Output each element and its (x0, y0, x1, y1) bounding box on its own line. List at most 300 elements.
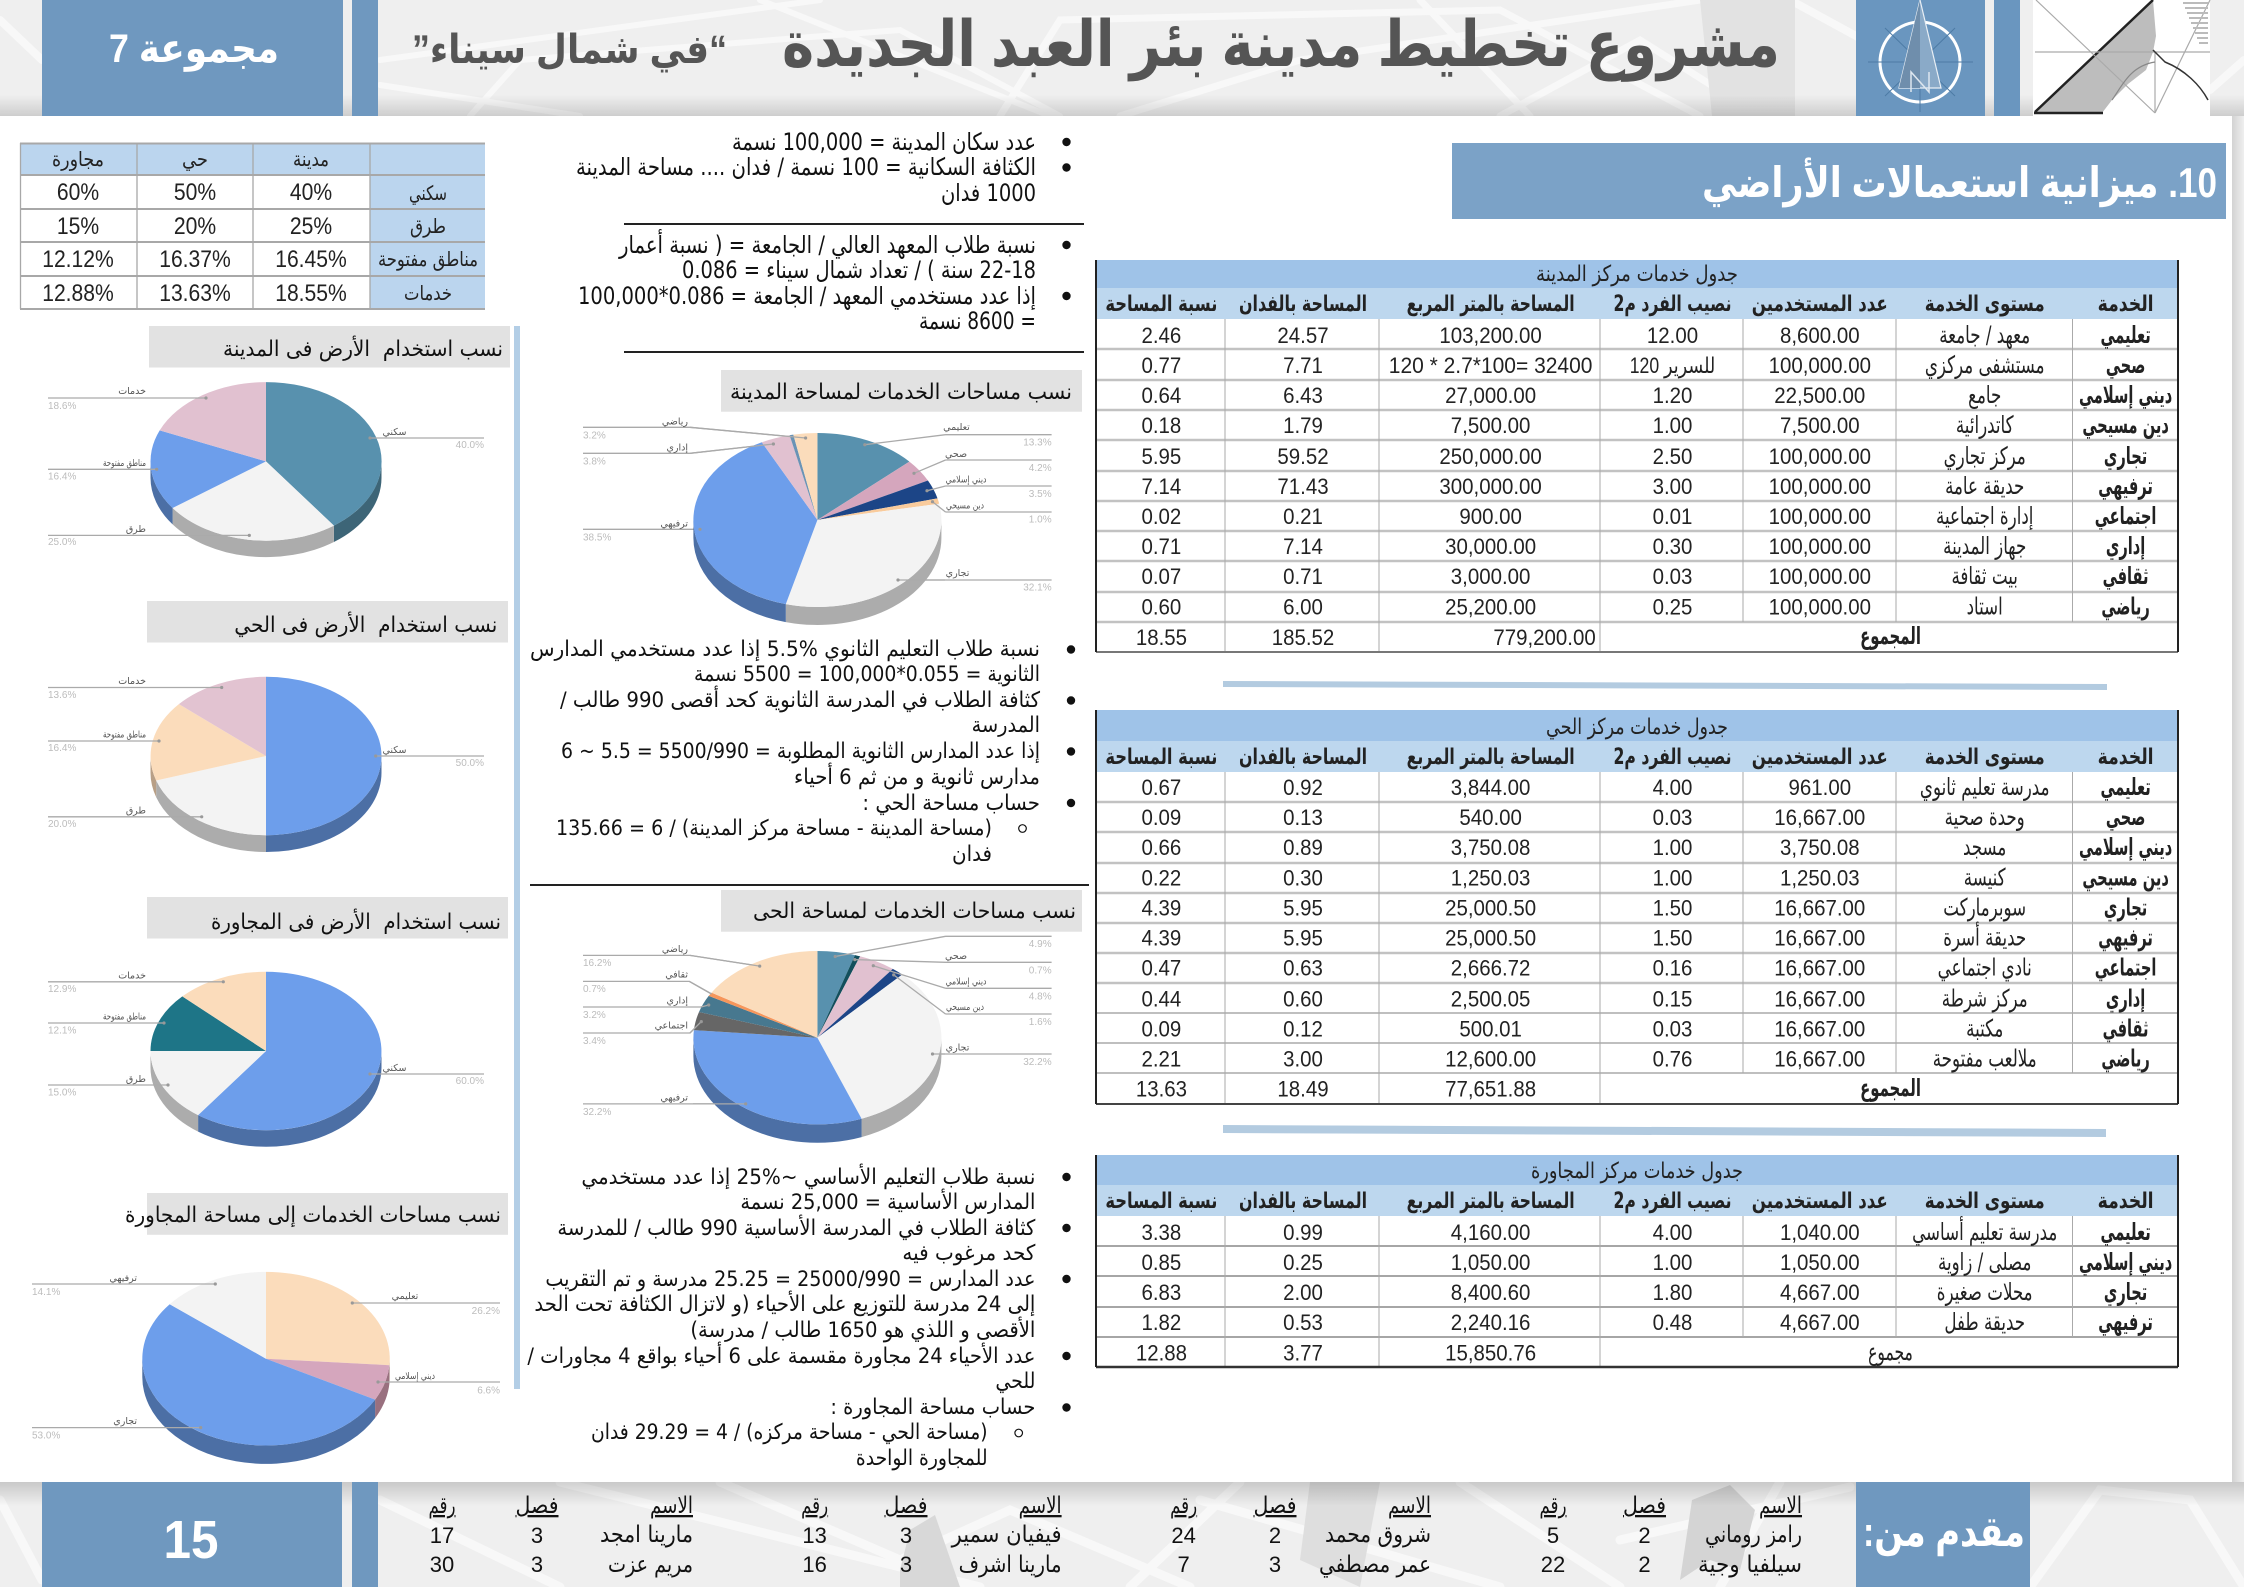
table: district center services: 13.63 (1136, 1077, 1187, 1102)
chart: land use in district: 13.6% (48, 690, 76, 701)
footer accent strip (352, 1482, 378, 1587)
table: district center services: 0.89 (1283, 835, 1323, 860)
table: city center services: 0.30 (1653, 534, 1692, 559)
table: land use summary: مناطق مفتوحة (378, 247, 478, 271)
text block: secondary school calculations: نسبة طلاب التعليم الثانوي %5.5 إذا عدد مستخدمي المدارس (530, 637, 1040, 662)
table: district center services: عدد المستخدمين (1752, 745, 1888, 770)
chart: services to neighbourhood area: ترفيهي (109, 1273, 137, 1284)
table: city center services: 2.50 (1653, 444, 1692, 469)
chart heading (721, 370, 1082, 412)
chart heading (149, 326, 510, 368)
table: city center services: 100,000.00 (1769, 534, 1871, 559)
chart: services to district area: صحي (945, 951, 967, 962)
text block: secondary school calculations: كثافة الطلاب في المدرسة الثانوية كحد أقصى 990 طالب / (560, 685, 1041, 713)
text block: basic school and neighbourhood calculations: نسبة طلاب التعليم الأساسي ~%25 إذا عدد مستخدمي (581, 1163, 1035, 1190)
table: district center services: المساحة بالفدان (1239, 745, 1367, 770)
table: city center services: 0.01 (1653, 504, 1692, 529)
chart: services to neighbourhood area: 53.0% (32, 1430, 60, 1442)
table: neighbourhood center services: المساحة بالمتر المربع (1407, 1189, 1575, 1214)
footer: team column 4 (1540, 1493, 1802, 1578)
table: district center services: نادي اجتماعي (1938, 953, 2032, 981)
table: district center services: 0.15 (1653, 987, 1692, 1012)
footer: team column 4: 22 (1541, 1552, 1565, 1577)
table: district center services (1096, 710, 2178, 1104)
footer: team column 2: الاسم (1019, 1493, 1062, 1519)
table: district center services: 1.00 (1653, 866, 1692, 891)
header subtitle: “في شمال سيناء” (412, 28, 727, 73)
table: city center services: 100,000.00 (1769, 444, 1871, 469)
table: neighbourhood center services: 0.99 (1283, 1220, 1323, 1245)
table: neighbourhood center services: 6.83 (1141, 1280, 1181, 1305)
text block: basic school and neighbourhood calculations: للمجاورة الواحدة (856, 1446, 988, 1471)
chart heading: نسب مساحات الخدمات إلى مساحة المجاورة (125, 1203, 501, 1228)
table: district center services: 4.00 (1653, 775, 1692, 800)
table: city center services: مستوى الخدمة (1925, 292, 2045, 317)
chart: land use in district: طرق (126, 806, 146, 816)
footer: team column 4: 2 (1638, 1523, 1651, 1548)
chart: services to city area: 32.1% (1023, 582, 1052, 594)
text block: secondary school calculations: مدارس ثانوية و من ثم 6 أحياء (794, 762, 1040, 790)
table: city center services: 0.25 (1653, 595, 1692, 620)
chart: land use in city: طرق (126, 524, 146, 535)
table: city center services: 71.43 (1277, 474, 1329, 499)
table: district center services: 0.16 (1653, 956, 1692, 981)
footer: team column 1 (428, 1493, 693, 1578)
chart: services to city area: 3.2% (583, 430, 606, 442)
chart: services to district area: رياضي (662, 944, 688, 955)
table: district center services: 5.95 (1283, 896, 1323, 921)
table: district center services: 0.22 (1141, 866, 1181, 891)
table: land use summary: مجاورة (52, 147, 104, 171)
table: neighbourhood center services: مستوى الخدمة (1925, 1189, 2045, 1214)
table: neighbourhood center services: 0.85 (1141, 1250, 1181, 1275)
chart heading: نسب استخدام الأرض فى الحي (234, 611, 497, 638)
footer: team column 1: رقم (428, 1493, 456, 1519)
chart: services to district area: 0.7% (1029, 966, 1052, 976)
table: city center services: 2.46 (1141, 323, 1181, 348)
chart heading (125, 1193, 508, 1235)
table: district center services: مسجد (1963, 833, 2006, 861)
footer: team column 1: 17 (430, 1523, 454, 1548)
chart: land use in neighbourhood: خدمات (118, 970, 146, 982)
table: district center services: 0.09 (1141, 805, 1181, 830)
table: city center services: مستشفى مركزي (1925, 351, 2045, 379)
chart: services to city area: ديني إسلامي (946, 474, 986, 486)
table: city center services: 900.00 (1459, 504, 1522, 529)
table: district center services: 961.00 (1789, 775, 1851, 800)
table: district center services: سوبرماركت (1943, 893, 2026, 921)
table: city center services: 7.14 (1141, 474, 1181, 499)
table: district center services: المجموع (1860, 1073, 1921, 1102)
table: city center services: 120 * 2.7*100= 32400 (1389, 353, 1592, 378)
table: city center services: 0.02 (1141, 504, 1181, 529)
table: city center services: مركز تجاري (1944, 442, 2026, 470)
table: district center services: 500.01 (1459, 1017, 1522, 1042)
chart: services to district area: ترفيهي (660, 1092, 688, 1104)
table: city center services: 100,000.00 (1769, 595, 1871, 620)
chart: land use in neighbourhood: مناطق مفتوحة (103, 1012, 146, 1022)
table: neighbourhood center services: عدد المستخدمين (1752, 1189, 1888, 1214)
table: district center services: تعليمي (2100, 773, 2151, 801)
chart: land use in neighbourhood: سكني (382, 1063, 407, 1074)
table: city center services (1096, 260, 2178, 652)
section heading (1452, 143, 2226, 219)
table: district center services: 0.03 (1653, 1017, 1692, 1042)
chart: services to district area: 4.9% (1029, 939, 1052, 950)
table: neighbourhood center services: 4,667.00 (1780, 1280, 1860, 1305)
table: district center services: 3.00 (1283, 1047, 1323, 1072)
table: city center services: 1.79 (1283, 413, 1323, 438)
header accent strip right (1994, 0, 2020, 116)
table: neighbourhood center services: محلات صغيرة (1937, 1278, 2033, 1306)
table: land use summary: 60% (57, 179, 99, 205)
chart: services to neighbourhood area: ديني إسلامي (395, 1371, 435, 1382)
table: neighbourhood center services: 4,667.00 (1780, 1310, 1860, 1335)
footer: team column 2: مارينا اشرف (959, 1552, 1062, 1578)
chart: services to district area: تجاري (946, 1042, 970, 1054)
table: city center services: 3,000.00 (1451, 564, 1530, 589)
main title: مشروع تخطيط مدينة بئر العبد الجديدة (782, 8, 1780, 82)
table: neighbourhood center services: 1.82 (1141, 1310, 1181, 1335)
table: neighbourhood center services: نسبة المساحة (1105, 1189, 1217, 1214)
rule (624, 351, 1084, 353)
text block: secondary school calculations: الثانوية = 0.055*100,000 = 5500 نسمة (694, 662, 1040, 687)
table: neighbourhood center services: 2,240.16 (1451, 1310, 1530, 1335)
table: neighbourhood center services: 0.53 (1283, 1310, 1323, 1335)
footer: team column 1: 3 (531, 1523, 543, 1548)
table: city center services: نصيب الفرد م2 (1614, 292, 1732, 317)
table: district center services: 4.39 (1141, 926, 1181, 951)
table: city center services: 3.00 (1653, 474, 1692, 499)
chart: services to district area: 32.2% (1023, 1057, 1052, 1068)
chart: services to district area: 3.4% (583, 1036, 606, 1047)
table: city center services: استاد (1967, 592, 2003, 620)
footer: team column 4: رامز روماني (1705, 1522, 1802, 1548)
table: city center services: 100,000.00 (1769, 474, 1871, 499)
table: district center services: 4.39 (1141, 896, 1181, 921)
table: district center services: تجاري (2104, 894, 2147, 923)
chart: land use in neighbourhood: 12.1% (48, 1026, 76, 1036)
table: city center services: 59.52 (1277, 444, 1329, 469)
chart: land use in neighbourhood: 15.0% (48, 1088, 76, 1098)
table: neighbourhood center services: ترفيهي (2098, 1308, 2153, 1336)
text block: secondary school calculations (530, 637, 1075, 867)
chart: services to neighbourhood area (32, 1193, 508, 1464)
table: city center services: إداري (2106, 532, 2145, 561)
table: district center services: 5.95 (1283, 926, 1323, 951)
footer: team column 3: 2 (1269, 1523, 1281, 1548)
table: land use summary: 40% (290, 179, 332, 205)
divider (1223, 681, 2107, 690)
table: neighbourhood center services: نصيب الفرد م2 (1614, 1189, 1732, 1214)
chart: services to city area: صحي (945, 449, 967, 460)
chart heading (147, 897, 508, 938)
table: district center services: 18.49 (1277, 1077, 1329, 1102)
chart: land use in city: 18.6% (48, 401, 76, 412)
chart: services to district area: 1.6% (1029, 1017, 1052, 1028)
table: district center services: دين مسيحي (2082, 864, 2169, 892)
text block: city population calculations (576, 128, 1071, 335)
table: neighbourhood center services: 2.00 (1283, 1280, 1323, 1305)
text block: basic school and neighbourhood calculations: عدد المدارس = 25000/990 = 25.25 مدرسة و تم التقريب (545, 1267, 1035, 1292)
table: city center services: جامع (1968, 381, 2001, 409)
table: district center services: 1,250.03 (1780, 866, 1860, 891)
chart: services to city area: دين مسيحي (946, 500, 984, 512)
footer: team column 3 (1170, 1493, 1431, 1578)
table: district center services: 16,667.00 (1774, 896, 1865, 921)
chart: land use in district: 20.0% (48, 819, 76, 830)
table: land use summary: 12.12% (42, 246, 114, 272)
table: district center services: كنيسة (1964, 863, 2006, 891)
table: neighbourhood center services: ديني إسلامي (2079, 1248, 2172, 1276)
chart: land use in neighbourhood: 12.9% (48, 984, 76, 995)
footer: team column 2: 3 (900, 1552, 912, 1577)
table: district center services: 1,250.03 (1451, 866, 1530, 891)
table: neighbourhood center services: 3.77 (1283, 1341, 1323, 1366)
table: land use summary: مدينة (293, 147, 329, 171)
table: district center services: 0.30 (1283, 866, 1323, 891)
table: district center services: 3,750.08 (1780, 835, 1860, 860)
table: district center services: 0.92 (1283, 775, 1323, 800)
vertical blue divider (514, 326, 520, 1389)
footer: page number badge (42, 1482, 342, 1587)
table: district center services: 0.09 (1141, 1017, 1181, 1042)
table: city center services: 0.18 (1141, 413, 1181, 438)
chart: services to neighbourhood area: تعليمي (392, 1291, 419, 1302)
table: city center services: كاتدرائية (1956, 411, 2014, 439)
table: neighbourhood center services: المساحة بالفدان (1239, 1189, 1367, 1214)
table: city center services: 6.00 (1283, 595, 1323, 620)
footer: page number badge: 15 (164, 1510, 218, 1570)
chart: services to city area: 1.0% (1029, 514, 1052, 526)
chart: land use in district: 50.0% (456, 758, 484, 769)
table: land use summary: 12.88% (42, 280, 114, 306)
table: district center services: مدرسة تعليم ثانوي (1920, 773, 2049, 801)
table: city center services: للسرير 120 (1630, 353, 1715, 378)
table: city center services: 6.43 (1283, 383, 1323, 408)
table: city center services: 27,000.00 (1445, 383, 1536, 408)
table: city center services: 0.21 (1283, 504, 1323, 529)
table: city center services: إدارة اجتماعية (1936, 502, 2033, 531)
table: city center services: 7,500.00 (1451, 413, 1530, 438)
chart: land use in district (48, 601, 508, 852)
table: city center services: جدول خدمات مركز المدينة (1536, 262, 1738, 287)
table: land use summary: 25% (290, 213, 332, 239)
table: city center services: رياضي (2101, 593, 2150, 621)
table: land use summary: 16.45% (275, 246, 347, 272)
table: land use summary: حي (182, 147, 208, 172)
table: city center services: ترفيهي (2098, 472, 2153, 500)
table: city center services: 0.71 (1283, 564, 1323, 589)
table: city center services: 5.95 (1141, 444, 1181, 469)
table: land use summary: 20% (174, 213, 216, 239)
table: city center services: المساحة بالفدان (1239, 292, 1367, 317)
table: city center services: دين مسيحي (2082, 411, 2169, 439)
table: city center services: تجاري (2104, 442, 2147, 471)
table: district center services: 0.76 (1653, 1047, 1692, 1072)
text block: basic school and neighbourhood calculations (527, 1163, 1071, 1471)
chart: land use in city: 40.0% (456, 440, 484, 451)
text block: basic school and neighbourhood calculations: الأقصى و اللذي هو 1650 طالب / مدرسة) (690, 1316, 1035, 1343)
chart heading: نسب مساحات الخدمات لمساحة المدينة (730, 380, 1072, 405)
table: district center services: ترفيهي (2098, 924, 2153, 952)
chart: land use in district: مناطق مفتوحة (103, 730, 146, 740)
table: land use summary: 16.37% (159, 246, 231, 272)
table: city center services: 0.77 (1141, 353, 1181, 378)
table: district center services: 16,667.00 (1774, 805, 1865, 830)
table: city center services: 0.71 (1141, 534, 1181, 559)
table: city center services: 7.14 (1283, 534, 1323, 559)
text block: city population calculations: عدد سكان المدينة = 100,000 نسمة (732, 128, 1036, 156)
table: city center services: بيت ثقافة (1951, 562, 2018, 590)
chart: services to city area (583, 370, 1082, 625)
footer: team column 1: 30 (430, 1552, 454, 1577)
table: district center services: ديني إسلامي (2079, 833, 2172, 861)
table: district center services: صحي (2106, 803, 2145, 831)
table: district center services: 25,000.50 (1445, 896, 1536, 921)
footer: presented by badge (1856, 1482, 2030, 1587)
chart: services to city area: تعليمي (943, 422, 970, 433)
table: district center services: وحدة صحية (1945, 803, 2025, 831)
table: neighbourhood center services: 8,400.60 (1451, 1280, 1530, 1305)
table: neighbourhood center services: 3.38 (1141, 1220, 1181, 1245)
table: city center services: 8,600.00 (1780, 323, 1860, 348)
table: district center services: 540.00 (1459, 805, 1522, 830)
table: district center services: 0.60 (1283, 987, 1323, 1012)
chart: land use in city: 25.0% (48, 537, 76, 548)
footer: team column 2: فيفيان سمير (951, 1522, 1062, 1548)
text block: basic school and neighbourhood calculations: للحي (995, 1369, 1035, 1394)
table: district center services: 0.67 (1141, 775, 1181, 800)
table: city center services: المساحة بالمتر المربع (1407, 292, 1575, 317)
chart: services to district area: 3.2% (583, 1010, 606, 1021)
chart: services to neighbourhood area: 14.1% (32, 1287, 60, 1298)
text block: basic school and neighbourhood calculations: كثافة الطلاب في المدرسة الأساسية 990 طالب / للمدرسة (557, 1214, 1036, 1241)
table: district center services: مركز شرطة (1942, 984, 2028, 1012)
table: city center services: الخدمة (2098, 292, 2154, 317)
chart: land use in district: خدمات (118, 676, 146, 687)
table: district center services: جدول خدمات مركز الحي (1546, 715, 1728, 740)
table: neighbourhood center services: 15,850.76 (1445, 1341, 1536, 1366)
table: district center services: 2,666.72 (1451, 956, 1530, 981)
table: city center services: 7,500.00 (1780, 413, 1860, 438)
footer: team column 2: 16 (802, 1552, 827, 1577)
text block: city population calculations: نسبة طلاب المعهد العالي / الجامعة = ( نسبة أعمار (618, 229, 1036, 259)
table: land use summary (20, 143, 485, 309)
table: city center services: اجتماعي (2095, 502, 2156, 530)
chart: services to district area: 16.2% (583, 958, 611, 969)
footer: presented by badge: مقدم من: (1863, 1508, 2025, 1557)
table: neighbourhood center services: الخدمة (2098, 1189, 2154, 1214)
table: city center services: 30,000.00 (1445, 534, 1536, 559)
text block: city population calculations: = 8600 نسمة (919, 307, 1036, 335)
footer: team column 4: 5 (1547, 1523, 1559, 1548)
table: neighbourhood center services: جدول خدمات مركز المجاورة (1531, 1159, 1743, 1184)
chart heading: نسب استخدام الأرض فى المجاورة (211, 908, 501, 935)
table: neighbourhood center services: 1.00 (1653, 1250, 1692, 1275)
chart: land use in neighbourhood (48, 897, 508, 1147)
table: district center services: الخدمة (2098, 745, 2154, 770)
text block: secondary school calculations: إذا عدد المدارس الثانوية المطلوبة = 5500/990 = 5.5 ~ 6 (561, 739, 1040, 764)
text block: secondary school calculations: المدرسة (972, 713, 1040, 738)
table: neighbourhood center services: 12.88 (1136, 1341, 1187, 1366)
footer: team column 3: شروق محمد (1325, 1522, 1431, 1548)
table: city center services: معهد / جامعة (1939, 321, 2030, 349)
table: district center services: 0.03 (1653, 805, 1692, 830)
chart: land use in city: مناطق مفتوحة (103, 458, 146, 469)
icon: compass (1856, 0, 1985, 116)
footer: team column 3: رقم (1170, 1493, 1197, 1519)
table: city center services: 1.20 (1653, 383, 1692, 408)
table: city center services: تعليمي (2100, 321, 2151, 349)
header: group badge (42, 0, 343, 116)
text block: basic school and neighbourhood calculations: كحد مرغوب فيه (902, 1241, 1036, 1266)
table: neighbourhood center services: تعليمي (2100, 1218, 2151, 1246)
divider (1223, 1125, 2106, 1137)
text block: secondary school calculations: (مساحة المدينة - مساحة مركز المدينة) / 6 = 135.66 (556, 816, 992, 841)
chart: services to district area: 0.7% (583, 984, 606, 995)
table: district center services: 25,000.50 (1445, 926, 1536, 951)
table: city center services: 103,200.00 (1439, 323, 1542, 348)
table: district center services: 2,500.05 (1451, 987, 1530, 1012)
chart: land use in city: 16.4% (48, 472, 76, 482)
table: city center services: 100,000.00 (1769, 353, 1871, 378)
chart: services to neighbourhood area: 26.2% (472, 1306, 500, 1317)
footer: team column 3: الاسم (1388, 1493, 1431, 1519)
table: city center services: 300,000.00 (1439, 474, 1542, 499)
chart: services to city area: 38.5% (583, 532, 611, 544)
text block: basic school and neighbourhood calculations: (مساحة الحي - مساحة مركزه) / 4 = 29.29 فدان (591, 1420, 988, 1445)
table: neighbourhood center services: 1,050.00 (1780, 1250, 1860, 1275)
table: district center services: ثقافي (2103, 1015, 2149, 1043)
table: neighbourhood center services: مدرسة تعليم أساسي (1912, 1216, 2057, 1246)
footer: team column 2: 3 (900, 1523, 912, 1548)
table: district center services: حديقة أسرة (1943, 921, 2026, 951)
chart heading (147, 601, 508, 642)
text block: secondary school calculations: فدان (952, 842, 992, 867)
table: city center services: 0.60 (1141, 595, 1181, 620)
table: neighbourhood center services (1096, 1155, 2178, 1367)
footer: team column 3: فصل (1254, 1493, 1296, 1519)
chart: services to city area: رياضي (662, 416, 688, 428)
table: district center services: ملالعب مفتوحة (1933, 1044, 2037, 1072)
table: city center services: 7.71 (1283, 353, 1323, 378)
table: district center services: 77,651.88 (1445, 1077, 1536, 1102)
table: district center services: 0.44 (1141, 987, 1181, 1012)
text block: city population calculations: 1000 فدان (941, 179, 1036, 207)
chart: services to city area: إداري (666, 442, 688, 454)
chart: services to district area: ثقافي (665, 970, 688, 980)
table: city center services: صحي (2106, 351, 2145, 379)
table: district center services: نسبة المساحة (1105, 745, 1217, 770)
table: neighbourhood center services: 0.25 (1283, 1250, 1323, 1275)
chart: services to neighbourhood area: 6.6% (477, 1386, 500, 1396)
chart: land use in city (48, 326, 510, 557)
table: neighbourhood center services: 4,160.00 (1451, 1220, 1530, 1245)
table: city center services: عدد المستخدمين (1752, 292, 1888, 317)
table: city center services: 100,000.00 (1769, 504, 1871, 529)
table: district center services: 2.21 (1141, 1047, 1181, 1072)
table: district center services: 1.50 (1653, 896, 1692, 921)
chart: services to city area: 3.5% (1029, 489, 1052, 500)
footer: team column 2 (801, 1493, 1062, 1578)
rule (530, 884, 1089, 886)
footer: team column 4: سيلفيا وجية (1698, 1552, 1802, 1578)
chart: services to district area (583, 890, 1082, 1143)
table: city center services: 185.52 (1272, 625, 1334, 650)
table: city center services: ديني إسلامي (2079, 381, 2172, 409)
table: city center services: 0.07 (1141, 564, 1181, 589)
